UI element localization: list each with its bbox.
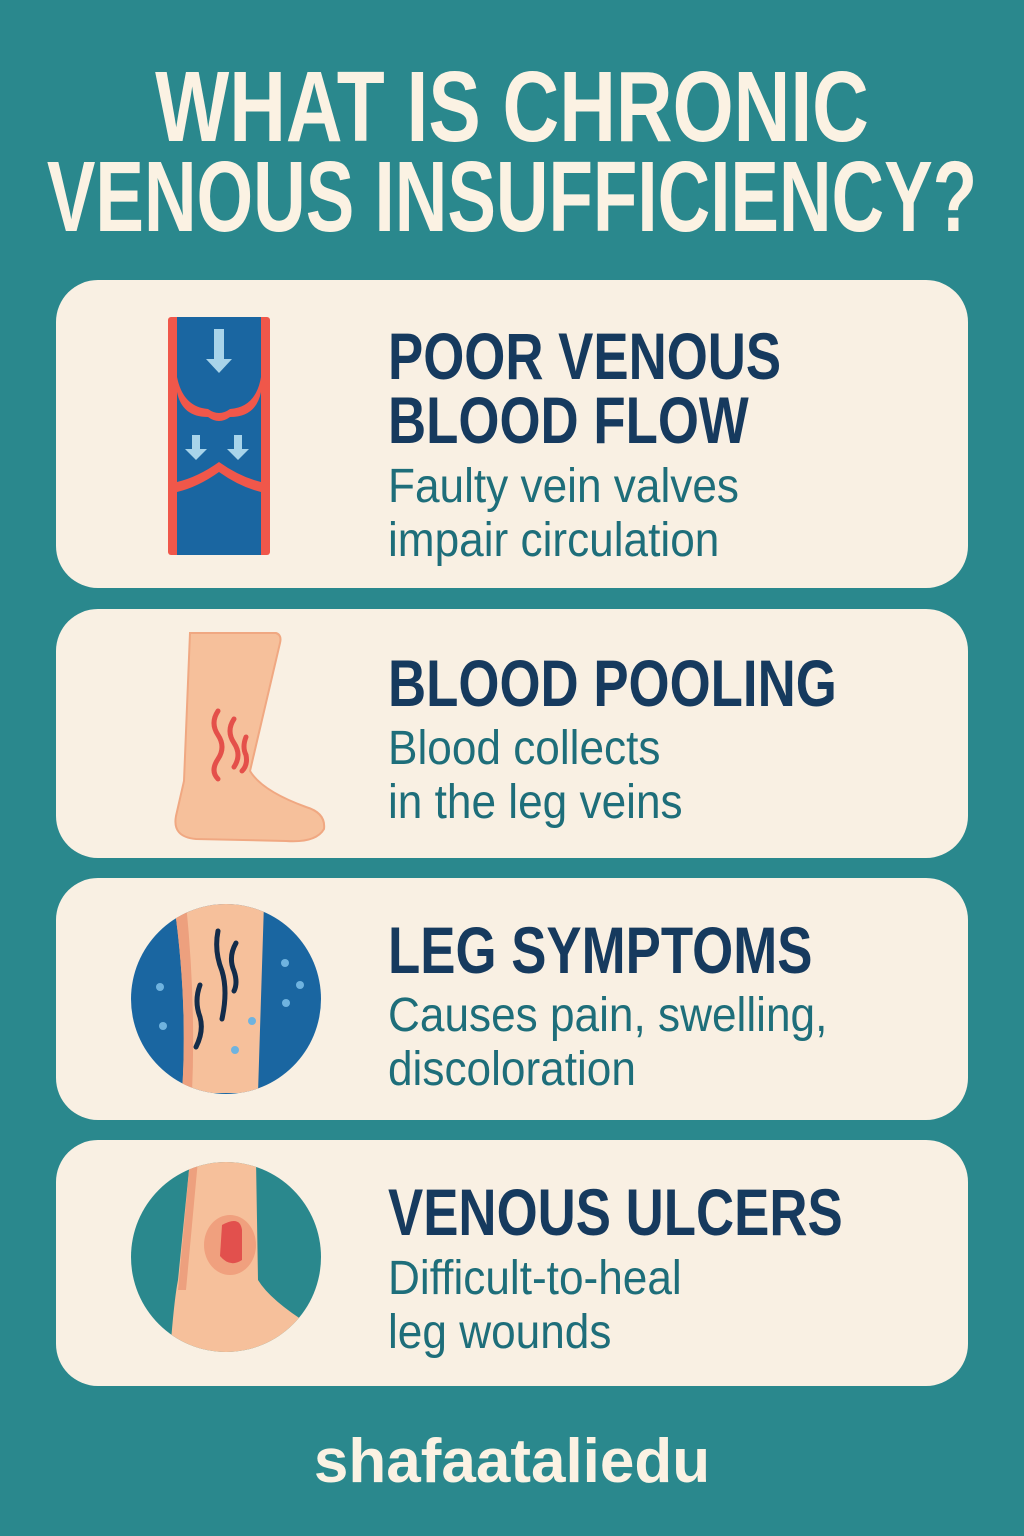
icon: leg with ulcer bbox=[131, 1162, 321, 1352]
heading: LEG SYMPTOMS bbox=[388, 913, 812, 987]
text: Causes pain, swelling, bbox=[388, 989, 827, 1042]
panel: leg symptoms bbox=[56, 878, 968, 1120]
panel: blood pooling bbox=[56, 609, 968, 858]
heading: BLOOD POOLING bbox=[388, 646, 837, 720]
title: WHAT IS CHRONIC bbox=[155, 51, 869, 163]
heading: VENOUS ULCERS bbox=[388, 1175, 843, 1249]
text bbox=[388, 989, 827, 1096]
heading: BLOOD FLOW bbox=[388, 383, 749, 457]
text: impair circulation bbox=[388, 514, 719, 567]
text: Difficult-to-heal bbox=[388, 1252, 682, 1305]
icon: swollen leg circle bbox=[131, 904, 321, 1094]
text bbox=[388, 460, 739, 567]
title: VENOUS INSUFFICIENCY? bbox=[47, 141, 977, 253]
text: discoloration bbox=[388, 1043, 636, 1096]
panel: poor venous blood flow bbox=[56, 280, 968, 588]
icon: leg with varicose veins bbox=[174, 632, 326, 842]
text: Blood collects bbox=[388, 722, 660, 775]
footer: author: shafaataliedu bbox=[314, 1427, 710, 1496]
heading: POOR VENOUS bbox=[388, 319, 781, 393]
icon: vein with valves bbox=[168, 317, 270, 555]
text: Faulty vein valves bbox=[388, 460, 739, 513]
title bbox=[47, 51, 977, 253]
panel: venous ulcers bbox=[56, 1140, 968, 1386]
heading bbox=[388, 319, 781, 457]
text: leg wounds bbox=[388, 1306, 611, 1359]
text bbox=[388, 1252, 682, 1359]
text bbox=[388, 722, 683, 829]
text: in the leg veins bbox=[388, 776, 683, 829]
